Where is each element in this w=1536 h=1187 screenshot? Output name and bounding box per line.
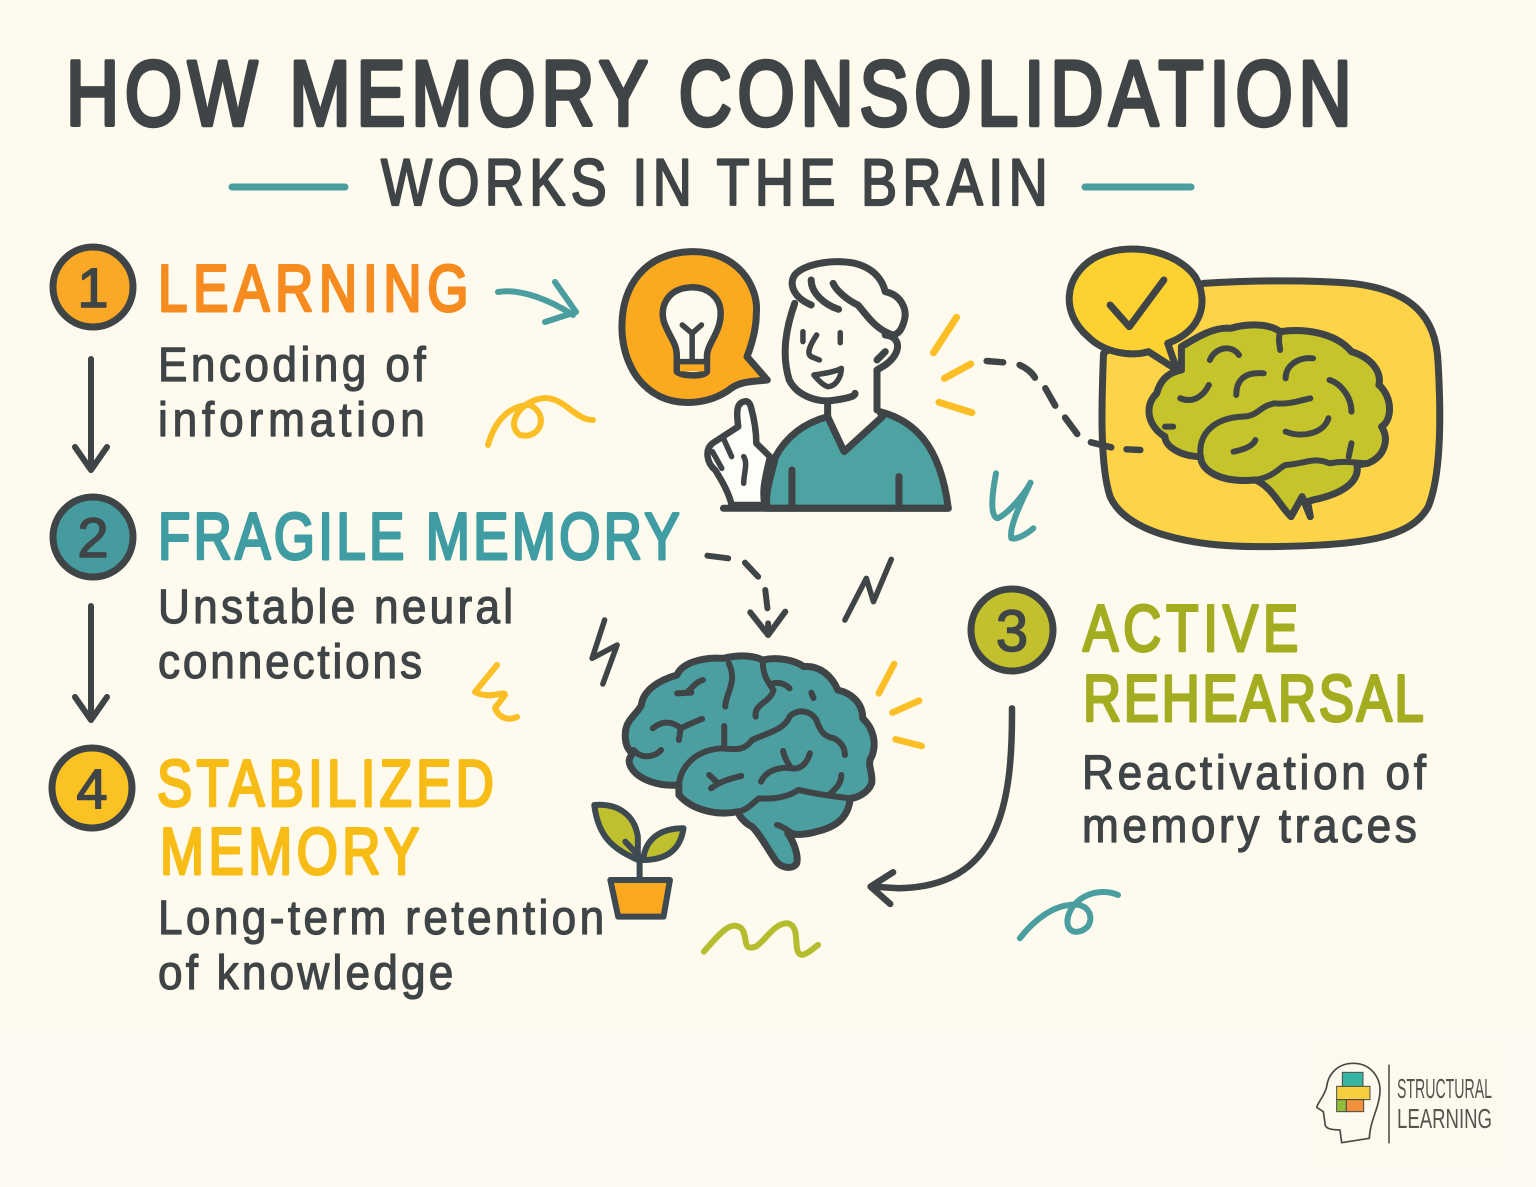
text: encoding of information	[158, 337, 426, 446]
arrow: learning to person	[498, 282, 576, 322]
badge 3: 3	[996, 599, 1028, 664]
icon: lightbulb speech bubble	[622, 252, 767, 402]
heading: stabilized memory: MEMORY	[160, 814, 419, 888]
arrow: step 2 to 4	[75, 606, 107, 720]
text: reactivation of memory traces: Reactivation of	[1082, 745, 1426, 799]
scribble: yellow squiggle	[475, 665, 517, 719]
icon: plant in pot	[594, 805, 684, 917]
heading: active rehearsal	[1083, 591, 1424, 735]
heading: active rehearsal: REHEARSAL	[1083, 661, 1424, 735]
heading: stabilized memory	[157, 746, 494, 888]
scribble: orange curl	[488, 398, 593, 445]
badge 4: 4	[76, 757, 108, 820]
step 4: stabilized memory	[52, 746, 604, 999]
badge 1	[53, 247, 133, 327]
hand	[707, 401, 770, 505]
text: long-term retention of knowledge: of knowledge	[158, 945, 453, 999]
badge 3	[971, 589, 1053, 671]
icon: olive brain	[1149, 325, 1390, 517]
logo wordmark	[1397, 1073, 1492, 1134]
scribble: teal curl	[1020, 892, 1118, 938]
arrow: step 1 to 2	[75, 359, 107, 470]
subtitle with rules: WORKS IN THE BRAIN	[381, 145, 1048, 219]
step 3: active rehearsal	[971, 589, 1426, 852]
face and hair	[785, 303, 855, 401]
text: long-term retention of knowledge	[158, 890, 604, 999]
icon: head with blocks	[1317, 1063, 1389, 1143]
heading: fragile memory: FRAGILE MEMORY	[158, 499, 680, 573]
heading: active rehearsal: ACTIVE	[1083, 591, 1298, 665]
step 2: fragile memory	[53, 497, 680, 688]
scribble: olive wave	[704, 923, 818, 955]
heading: stabilized memory: STABILIZED	[157, 746, 494, 820]
illustrations drawn from upper zoom coordinates	[622, 249, 1440, 547]
icon: checkmark speech bubble	[1069, 249, 1202, 370]
text: unstable neural connections	[158, 579, 513, 688]
title: HOW MEMORY CONSOLIDATION	[66, 42, 1352, 145]
badge 2: 2	[77, 506, 109, 569]
text: unstable neural connections: Unstable neural	[158, 579, 513, 633]
arrow: step 3 to brain	[871, 708, 1012, 904]
scribble: teal zigzag	[992, 473, 1033, 539]
text: reactivation of memory traces	[1082, 745, 1426, 852]
logo wordmark: LEARNING	[1397, 1103, 1492, 1134]
person pointing	[707, 262, 948, 508]
dashed arrow: person to brain card	[987, 361, 1140, 450]
sparks near person	[933, 317, 972, 413]
text: long-term retention of knowledge: Long-term retention	[158, 890, 604, 944]
badge 2	[53, 497, 133, 577]
badge 1: 1	[77, 256, 109, 319]
text: encoding of information: information	[158, 392, 425, 446]
dashed arrow: fragile memory to brain	[707, 556, 785, 635]
illustrations drawn from lower zoom coordinates	[592, 556, 1118, 955]
heading: learning: LEARNING	[158, 251, 468, 325]
logo: structural learning	[1307, 1040, 1505, 1170]
icon: teal brain	[625, 656, 874, 867]
step 1: learning	[53, 247, 468, 446]
panel: yellow brain card	[1102, 281, 1440, 547]
shirt	[767, 412, 948, 508]
sparks near teal brain	[879, 664, 922, 746]
text: encoding of information: Encoding of	[158, 337, 426, 391]
text: reactivation of memory traces: memory traces	[1082, 798, 1417, 852]
lightning left	[592, 620, 617, 684]
text: unstable neural connections: connections	[158, 634, 422, 688]
badge 4	[52, 748, 132, 828]
lightning right	[845, 559, 891, 620]
